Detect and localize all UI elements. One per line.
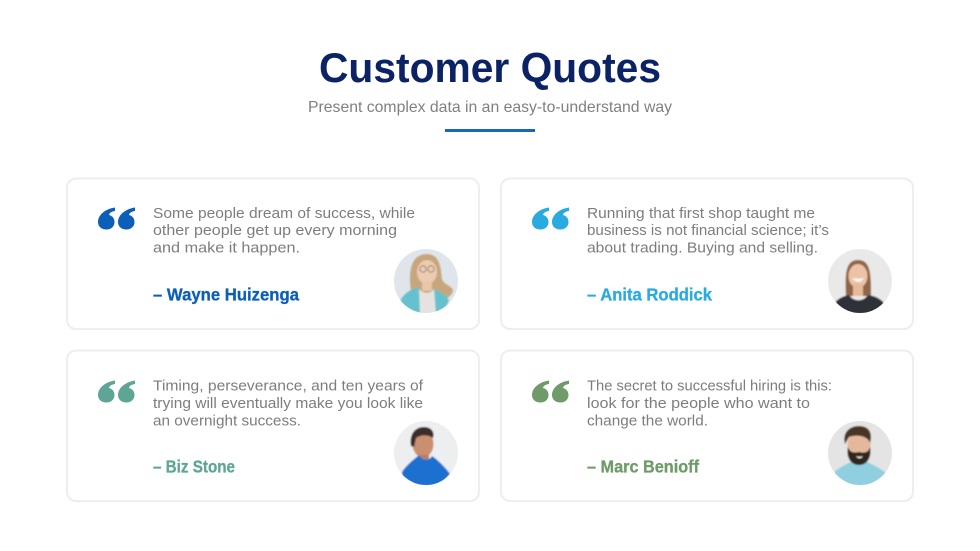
- quote text: [587, 205, 829, 256]
- quote text: Some people dream of success, while: [153, 205, 415, 222]
- quote text: [587, 378, 832, 430]
- card background: [501, 178, 913, 329]
- panel: Anita Roddick quote: [501, 178, 913, 329]
- quote text: change the world.: [587, 412, 708, 430]
- attribution: – Marc Benioff: [587, 456, 699, 476]
- attribution: – Anita Roddick: [587, 284, 712, 304]
- quote text: The secret to successful hiring is this:: [587, 378, 832, 394]
- attribution: – Biz Stone: [153, 456, 235, 476]
- title underline: [445, 129, 535, 132]
- attribution: – Wayne Huizenga: [153, 284, 299, 304]
- quote text: about trading. Buying and selling.: [587, 240, 818, 256]
- quote text: Timing, perseverance, and ten years of: [153, 378, 424, 394]
- panel: Marc Benioff quote: [501, 350, 913, 501]
- portrait: Anita Roddick: [827, 248, 893, 314]
- icon: quotation mark: [98, 208, 135, 230]
- quote text: Running that first shop taught me: [587, 205, 815, 222]
- quote text: an overnight success.: [153, 412, 301, 430]
- panel: Biz Stone quote: [67, 350, 479, 501]
- quote text: [153, 378, 424, 430]
- icon: quotation mark: [532, 380, 569, 402]
- quote text: business is not financial science; it’s: [587, 222, 829, 239]
- quote text: [153, 205, 415, 256]
- portrait: Wayne Huizenga: [393, 248, 459, 314]
- subtitle: Present complex data in an easy-to-understand way: [308, 99, 672, 116]
- quote text: other people get up every morning: [153, 222, 397, 239]
- card background: [501, 350, 913, 501]
- quote text: and make it happen.: [153, 240, 300, 256]
- card background: [67, 350, 479, 501]
- title: Customer Quotes: [319, 44, 661, 91]
- quote text: look for the people who want to: [587, 395, 810, 412]
- quote text: trying will eventually make you look like: [153, 395, 423, 412]
- portrait: Biz Stone: [393, 420, 459, 486]
- icon: quotation mark: [98, 380, 135, 402]
- icon: quotation mark: [532, 208, 569, 230]
- portrait: Marc Benioff: [827, 420, 893, 486]
- card background: [67, 178, 479, 329]
- panel: Wayne Huizenga quote: [67, 178, 479, 329]
